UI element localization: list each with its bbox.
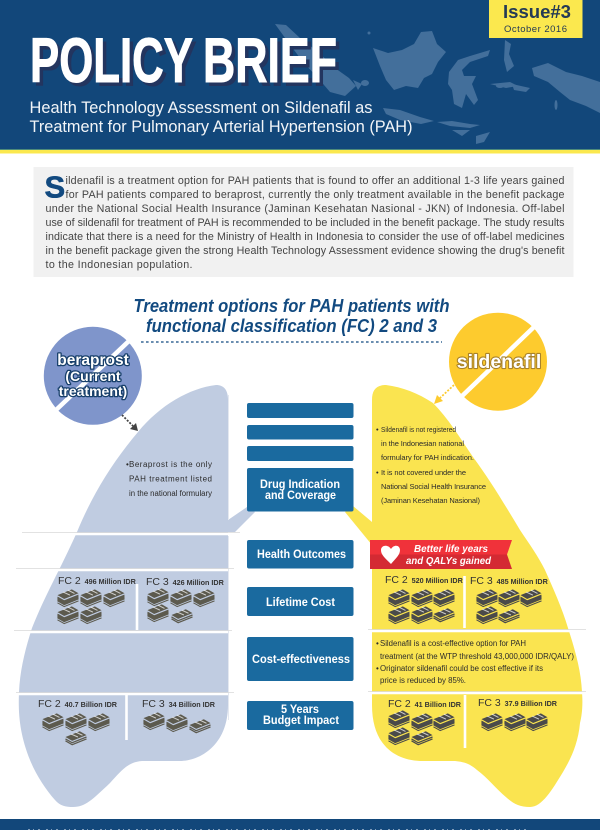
budget impact: beraprost — [38, 698, 216, 745]
footer bar — [0, 819, 600, 830]
cost-effectiveness text — [376, 639, 574, 685]
summary text: ildenafil is a treatment option for PAH patients that is found to offer an additional 1-3 life years gained — [66, 175, 565, 187]
issue badge: Issue#3 — [503, 2, 571, 22]
drop cap: S — [44, 170, 65, 204]
budget impact: beraprost: FC 2 40.7 Billion IDR — [38, 698, 118, 710]
beraprost coverage text: Beraprost is the only — [129, 460, 212, 469]
beraprost coverage text — [126, 460, 212, 498]
section heading: Treatment options for PAH patients with — [134, 295, 450, 316]
centre category buttons: 5 Years — [281, 704, 319, 716]
summary text — [46, 175, 565, 271]
section heading: functional classification (FC) 2 and 3 — [146, 315, 438, 336]
summary text: in the benefit package given the strong Health Technology Assessment evidence showing the drug's benefit — [46, 245, 565, 257]
sildenafil coverage text: It is not covered under the — [381, 468, 466, 477]
health outcomes ribbon — [370, 540, 512, 569]
sildenafil coverage text: National Social Health Insurance — [381, 482, 486, 491]
subtitle — [30, 99, 412, 136]
section heading — [134, 295, 450, 342]
sildenafil coverage text: • — [376, 425, 379, 434]
summary text: to the Indonesian population. — [46, 259, 192, 271]
main title: POLICY — [30, 26, 193, 96]
cost-effectiveness text: • — [376, 664, 379, 673]
lifetime cost: sildenafil: FC 2 520 Million IDR — [385, 574, 464, 586]
lifetime cost: beraprost: FC 2 496 Million IDR — [58, 575, 137, 587]
beraprost pill icon: treatment) — [59, 383, 127, 399]
centre category buttons: Budget Impact — [263, 715, 339, 727]
budget impact: sildenafil: FC 2 41 Billion IDR — [388, 698, 462, 710]
centre category buttons: and Coverage — [265, 490, 336, 502]
row separators — [14, 395, 586, 748]
budget impact: sildenafil — [388, 697, 558, 745]
arrow: sildenafil to lung — [434, 385, 454, 404]
summary text: under the National Social Health Insurance (Jaminan Kesehatan Nasional - JKN) of Indonesia. Off-label — [46, 203, 564, 215]
centre category buttons: Lifetime Cost — [266, 597, 335, 609]
sildenafil coverage text — [376, 425, 486, 505]
centre category buttons — [247, 403, 354, 730]
beraprost coverage text: in the national formulary — [129, 489, 212, 498]
health outcomes ribbon: Better life years — [414, 543, 488, 555]
centre category buttons: Drug Indication — [260, 479, 340, 491]
cost-effectiveness text: • — [376, 639, 379, 648]
right lung: sildenafil — [345, 385, 582, 807]
issue badge: October 2016 — [504, 24, 567, 35]
beraprost pill icon: beraprost — [57, 352, 129, 369]
lifetime cost: sildenafil: FC 3 485 Million IDR — [470, 575, 549, 587]
lifetime cost: beraprost: FC 3 426 Million IDR — [146, 576, 225, 588]
sildenafil coverage text: in the Indonesian national — [381, 439, 464, 448]
sildenafil coverage text: formulary for PAH indication. — [381, 453, 474, 462]
sildenafil coverage text: (Jaminan Kesehatan Nasional) — [381, 496, 480, 505]
centre category buttons: Cost-effectiveness — [252, 654, 350, 666]
cost-effectiveness text: Sildenafil is a cost-effective option for PAH — [380, 639, 526, 648]
main title: POLICY — [34, 30, 196, 100]
summary text: for PAH patients compared to beraprost, currently the only treatment available in the benefit package — [66, 189, 565, 201]
arrow: beraprost to lung — [122, 415, 138, 431]
beraprost coverage text: PAH treatment listed — [129, 474, 212, 484]
budget impact: sildenafil: FC 3 37.9 Billion IDR — [478, 697, 558, 709]
cost-effectiveness text: Originator sildenafil could be cost effective if its — [380, 664, 543, 673]
icon: heart — [381, 546, 400, 564]
map of Indonesia — [275, 24, 600, 144]
summary text: use of sildenafil for treatment of PAH is recommended to be included in the benefit package. The study results — [46, 217, 564, 229]
beraprost pill icon — [44, 327, 142, 425]
sildenafil coverage text: • — [376, 468, 379, 477]
main title: BRIEF — [206, 30, 340, 100]
summary text: indicate that there is a need for the Ministry of Health in Indonesia to consider the use of off-label medicines — [46, 231, 564, 243]
health outcomes ribbon: and QALYs gained — [406, 555, 492, 567]
sildenafil pill icon — [449, 313, 547, 411]
main title: BRIEF — [203, 26, 337, 96]
summary panel — [34, 167, 574, 277]
sildenafil pill icon: sildenafil — [457, 351, 541, 373]
issue badge — [489, 0, 582, 38]
lifetime cost: sildenafil — [385, 574, 549, 624]
cost-effectiveness text: price is reduced by 85%. — [380, 676, 466, 685]
subtitle: Health Technology Assessment on Sildenafil as — [30, 99, 372, 117]
subtitle: Treatment for Pulmonary Arterial Hypertension (PAH) — [30, 118, 412, 136]
beraprost coverage text: • — [126, 460, 129, 469]
header banner — [0, 0, 600, 154]
lifetime cost: beraprost — [57, 575, 225, 624]
sildenafil coverage text: Sildenafil is not registered — [381, 425, 456, 434]
beraprost pill icon: (Current — [65, 368, 121, 384]
cost-effectiveness text: treatment (at the WTP threshold 43,000,000 IDR/QALY) — [380, 652, 574, 661]
budget impact: beraprost: FC 3 34 Billion IDR — [142, 698, 216, 710]
centre category buttons: Health Outcomes — [257, 549, 346, 561]
left lung: beraprost — [19, 385, 255, 807]
